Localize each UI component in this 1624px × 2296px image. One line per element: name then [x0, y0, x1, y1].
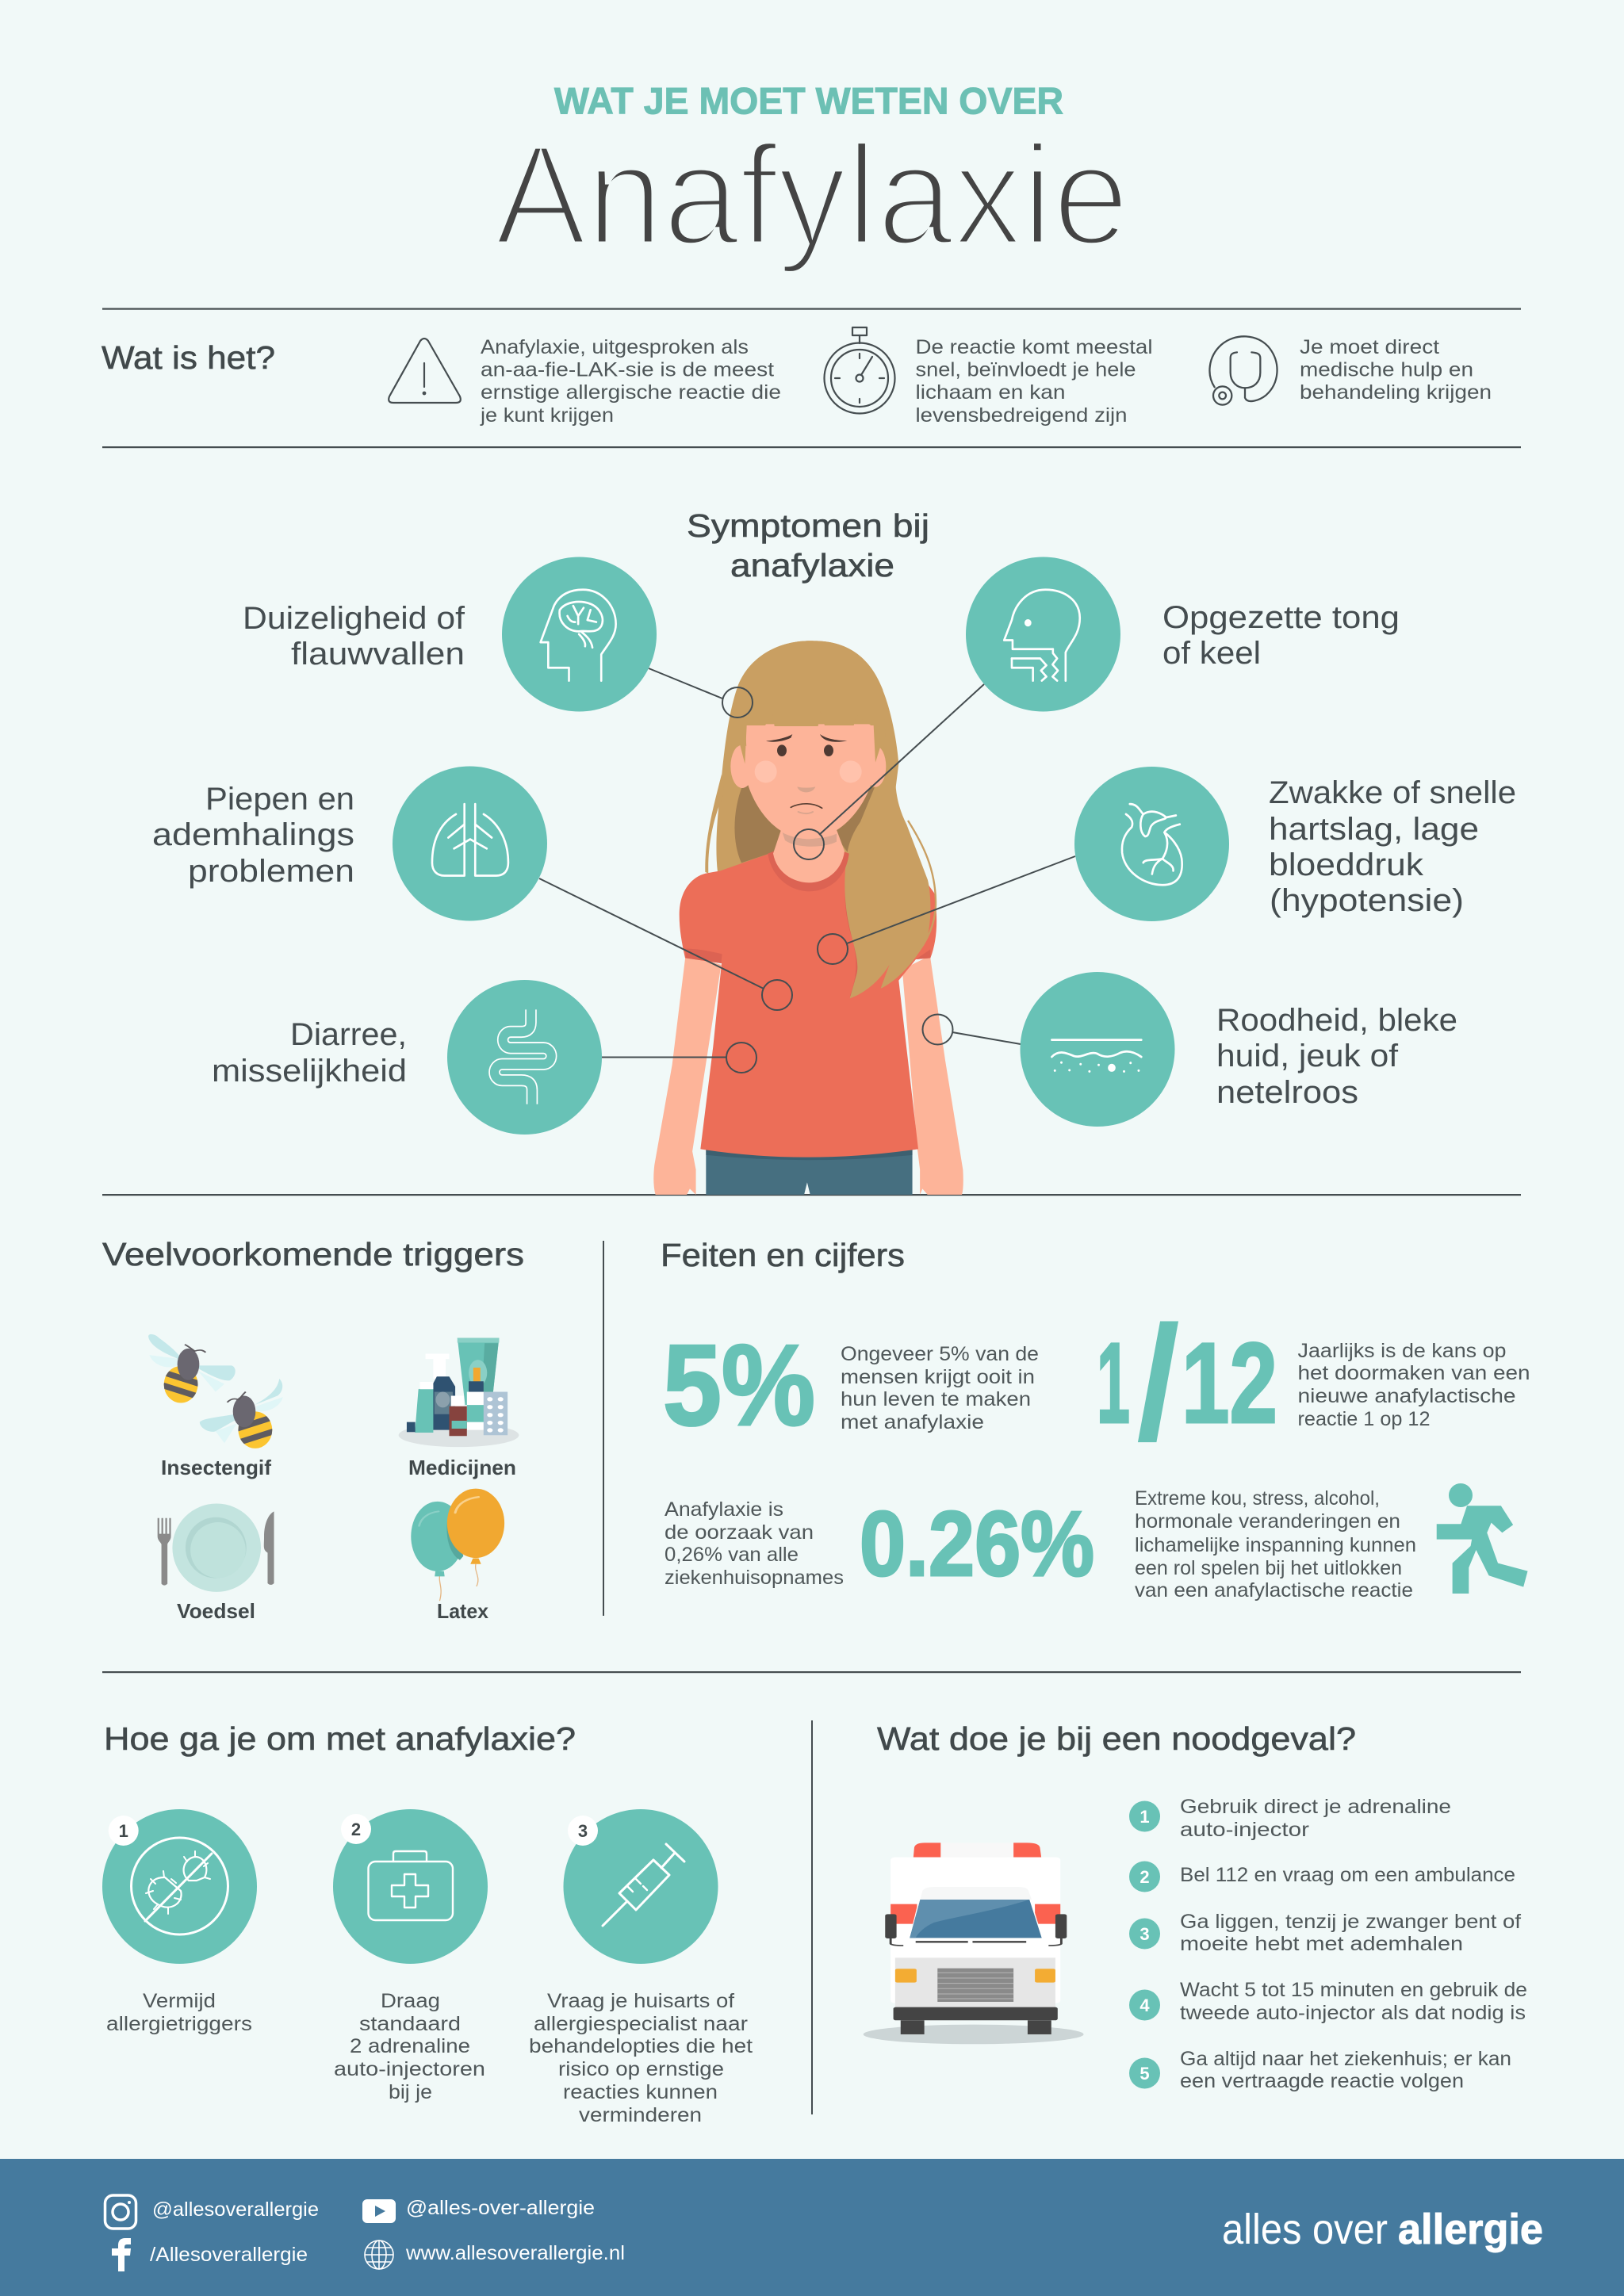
label [152, 782, 354, 889]
logo: alles over [1222, 2206, 1388, 2253]
stat: 1/12: 12 [1182, 1319, 1277, 1447]
icon: plate and cutlery [158, 1503, 274, 1592]
text: uitlokkers: Extreme kou, stress, alcohol, [1135, 1487, 1380, 1510]
text: 1/12: nieuwe anafylactische [1297, 1385, 1516, 1407]
handle: youtube: @alles-over-allergie [406, 2197, 595, 2219]
icon circle: avoid triggers [102, 1809, 257, 1964]
text: 5%: met anafylaxie [841, 1411, 984, 1433]
step 1: auto-injector [1180, 1819, 1309, 1841]
stat: 1/12: / [1136, 1292, 1180, 1474]
text: uitlokkers: van een anafylactische reactie [1135, 1579, 1413, 1601]
icon badge 2: 2 [351, 1820, 361, 1839]
symptom: diarree [212, 980, 602, 1135]
text step 3 [529, 1990, 753, 2126]
text step 2: standaard [359, 2013, 461, 2035]
text: hulp: medische hulp en [1300, 358, 1473, 381]
step 2: Bel 112 en vraag om een ambulance [1180, 1864, 1515, 1886]
text: uitlokkers: lichamelijke inspanning kunnen [1135, 1534, 1416, 1556]
heading: triggers: Veelvoorkomende triggers [102, 1236, 524, 1272]
icon: youtube [362, 2199, 396, 2223]
icon badge 3: 3 [578, 1821, 588, 1841]
logo: allergie [1398, 2206, 1543, 2253]
icon circle: syringe [563, 1809, 718, 1964]
title: Anafylaxie [495, 116, 1129, 275]
step 2 [1129, 1862, 1515, 1892]
step 3 [1129, 1911, 1521, 1955]
step 2 [333, 1809, 488, 2103]
label: Diarree, [290, 1017, 407, 1052]
text step 3: risico op ernstige [558, 2058, 724, 2080]
icon badge 2 [341, 1814, 371, 1844]
text step 3: verminderen [579, 2104, 702, 2126]
icon: instagram [105, 2195, 136, 2229]
label: huid, jeuk of [1216, 1039, 1399, 1073]
step 4: Wacht 5 tot 15 minuten en gebruik de [1180, 1979, 1527, 2001]
text: hulp: Je moet direct [1300, 336, 1439, 358]
label: insectengif: Insectengif [161, 1456, 271, 1479]
text: reactie: levensbedreigend zijn [915, 404, 1128, 427]
text step 2: 2 adrenaline [350, 2035, 470, 2057]
footer [0, 2159, 1624, 2296]
panel: feiten en cijfers [661, 1237, 1530, 1601]
label [243, 601, 465, 672]
step 2: 2 [1139, 1867, 1150, 1887]
text: 5%: hun leven te maken [841, 1388, 1031, 1410]
icon: skin layers [1051, 1040, 1141, 1073]
back hair [705, 641, 898, 890]
icon: globe [365, 2241, 393, 2269]
text step 3: allergiespecialist naar [534, 2013, 748, 2035]
text: 5%: Ongeveer 5% van de [841, 1343, 1039, 1365]
icon: runner [1437, 1483, 1528, 1594]
text: reactie: snel, beïnvloedt je hele [915, 358, 1136, 381]
text: uitlokkers: hormonale veranderingen en [1135, 1510, 1400, 1533]
text: uitleg: ernstige allergische reactie die [481, 381, 781, 404]
illustration: ambulance [864, 1843, 1084, 2044]
symptom: piepen [152, 766, 547, 921]
label: Piepen en [205, 782, 354, 817]
text step 1: allergietriggers [106, 2013, 252, 2035]
stat: 0.26%: 0.26% [860, 1492, 1094, 1595]
panel: wat is het [102, 327, 1492, 427]
step 5: 5 [1139, 2064, 1150, 2084]
symptom: huid [1020, 972, 1457, 1127]
text: uitlokkers [1135, 1487, 1416, 1601]
icon: facebook [112, 2238, 131, 2271]
text: hulp [1300, 336, 1492, 404]
text: 0,26%: Anafylaxie is [665, 1498, 783, 1521]
text: hulp: behandeling krijgen [1300, 381, 1492, 404]
heading: symptomen: anafylaxie [730, 547, 894, 584]
label: of keel [1162, 636, 1261, 671]
step 1: Gebruik direct je adrenaline [1180, 1796, 1451, 1818]
icon: head profile with throat [1004, 590, 1080, 681]
icon circle: skin [1020, 972, 1175, 1127]
icon: anatomical heart [1122, 804, 1182, 885]
icon: lungs [432, 804, 508, 875]
label [212, 1017, 407, 1089]
label: Roodheid, bleke [1216, 1003, 1457, 1038]
panel: hoe ga je om met anafylaxie [102, 1720, 753, 2126]
step 3 [529, 1809, 753, 2126]
handle: instagram: @allesoverallergie [152, 2198, 319, 2221]
text: 0,26%: de oorzaak van [665, 1521, 814, 1544]
step 1 [1129, 1796, 1451, 1841]
heading: feiten: Feiten en cijfers [661, 1237, 905, 1273]
panel: noodgeval [864, 1720, 1527, 2092]
text: 0,26%: ziekenhuisopnames [665, 1567, 844, 1589]
text step 3: Vraag je huisarts of [547, 1990, 734, 2012]
text step 2: bij je [389, 2081, 432, 2103]
text: reactie [915, 336, 1153, 427]
icon: balloons [411, 1489, 504, 1601]
heading: noodgeval: Wat doe je bij een noodgeval? [877, 1720, 1356, 1757]
text step 1: Vermijd [143, 1990, 216, 2012]
handle: facebook: /Allesoverallergie [150, 2244, 308, 2266]
step 1 [102, 1809, 257, 2035]
label: medicijnen: Medicijnen [408, 1456, 516, 1479]
label [1162, 600, 1400, 671]
text: uitleg: an-aa-fie-LAK-sie is de meest [481, 358, 774, 381]
step 3: Ga liggen, tenzij je zwanger bent of [1180, 1911, 1521, 1933]
icon: syringe [603, 1844, 684, 1926]
text: reactie: lichaam en kan [915, 381, 1066, 404]
label: Opgezette tong [1162, 600, 1400, 635]
panel: triggers [102, 1236, 524, 1623]
label: Duizeligheid of [243, 601, 465, 636]
step 4: 4 [1139, 1996, 1150, 2015]
text: 0,26%: 0,26% van alle [665, 1544, 799, 1566]
text step 2: Draag [381, 1990, 440, 2012]
label: flauwvallen [291, 637, 465, 672]
icon circle: brain [502, 557, 657, 712]
step 4 [1129, 1979, 1527, 2024]
label: bloeddruk [1269, 848, 1424, 882]
icon badge 3 [568, 1816, 598, 1846]
icon: intestine [494, 1008, 551, 1105]
icon: first aid kit [368, 1851, 453, 1920]
stat: 1/12: 1 [1097, 1319, 1130, 1447]
icon: head and brain [541, 590, 616, 681]
label: voedsel: Voedsel [177, 1599, 255, 1623]
text step 3: reacties kunnen [563, 2081, 718, 2103]
text: uitleg: je kunt krijgen [480, 404, 614, 427]
step 1: 1 [1139, 1807, 1150, 1827]
step 3: moeite hebt met ademhalen [1180, 1933, 1463, 1955]
heading: symptomen [687, 507, 929, 584]
text step 2: auto-injectoren [334, 2058, 485, 2080]
step 4: tweede auto-injector als dat nodig is [1180, 2002, 1526, 2024]
stat: 1/12 [1097, 1292, 1277, 1474]
icon badge 1: 1 [119, 1821, 128, 1841]
text step 1 [106, 1990, 252, 2035]
label [1216, 1003, 1457, 1110]
label: (hypotensie) [1270, 883, 1464, 918]
icon: pollen forbidden [132, 1838, 228, 1934]
text: uitleg: Anafylaxie, uitgesproken als [481, 336, 749, 358]
step 5: een vertraagde reactie volgen [1180, 2070, 1464, 2092]
heading: wat is het: Wat is het? [102, 339, 275, 376]
handle: website: www.allesoverallergie.nl [405, 2242, 625, 2264]
icon: bees [148, 1334, 283, 1448]
text step 2 [334, 1990, 485, 2103]
label: netelroos [1216, 1075, 1358, 1110]
text: 5%: mensen krijgt ooit in [841, 1366, 1035, 1388]
text: 0,26% [665, 1498, 844, 1589]
text: 1/12: het doormaken van een [1297, 1362, 1530, 1384]
icon circle: intestine [447, 980, 602, 1135]
icon circle: lungs [393, 766, 547, 921]
symptom: hartslag [1074, 767, 1516, 921]
step 5: Ga altijd naar het ziekenhuis; er kan [1180, 2048, 1511, 2070]
step 5 [1129, 2048, 1511, 2092]
icon circle: throat [966, 557, 1120, 712]
heading: hoe ga je om: Hoe ga je om met anafylaxie? [104, 1720, 576, 1757]
text: 5% [841, 1343, 1039, 1433]
icon circle: heart [1074, 767, 1229, 921]
icon: medicines [399, 1338, 519, 1447]
label: Zwakke of snelle [1269, 775, 1516, 810]
symptom: tong of keel [966, 557, 1400, 712]
icon: warning triangle [389, 339, 461, 403]
label: problemen [188, 854, 354, 889]
label: latex: Latex [437, 1599, 489, 1623]
icon badge 1 [109, 1816, 139, 1846]
text: 1/12 [1297, 1340, 1530, 1430]
text step 3: behandelopties die het [529, 2035, 753, 2057]
icon circle: first aid [333, 1809, 488, 1964]
head [730, 641, 886, 891]
icon: stethoscope [1209, 336, 1277, 405]
label: hartslag, lage [1269, 812, 1479, 847]
subtitle: WAT JE MOET WETEN OVER [554, 79, 1063, 122]
label: ademhalings [152, 817, 354, 852]
label: misselijkheid [212, 1054, 407, 1089]
stat: 5%: 5% [663, 1321, 815, 1449]
connector lines [539, 668, 1075, 1073]
heading: symptomen: Symptomen bij [687, 507, 929, 544]
text: reactie: De reactie komt meestal [915, 336, 1153, 358]
text: 1/12: reactie 1 op 12 [1297, 1408, 1431, 1430]
shirt and front hair [680, 763, 936, 1158]
step 3: 3 [1139, 1924, 1150, 1944]
arms and pants [653, 954, 963, 1195]
label [1269, 775, 1516, 918]
text: uitleg [480, 336, 781, 427]
illustration: girl [653, 641, 963, 1195]
logo [1222, 2206, 1543, 2253]
text: uitlokkers: een rol spelen bij het uitlokken [1135, 1557, 1402, 1579]
icon: stopwatch [825, 327, 894, 414]
text: 1/12: Jaarlijks is de kans op [1297, 1340, 1507, 1362]
symptom: duizeligheid [243, 557, 657, 712]
